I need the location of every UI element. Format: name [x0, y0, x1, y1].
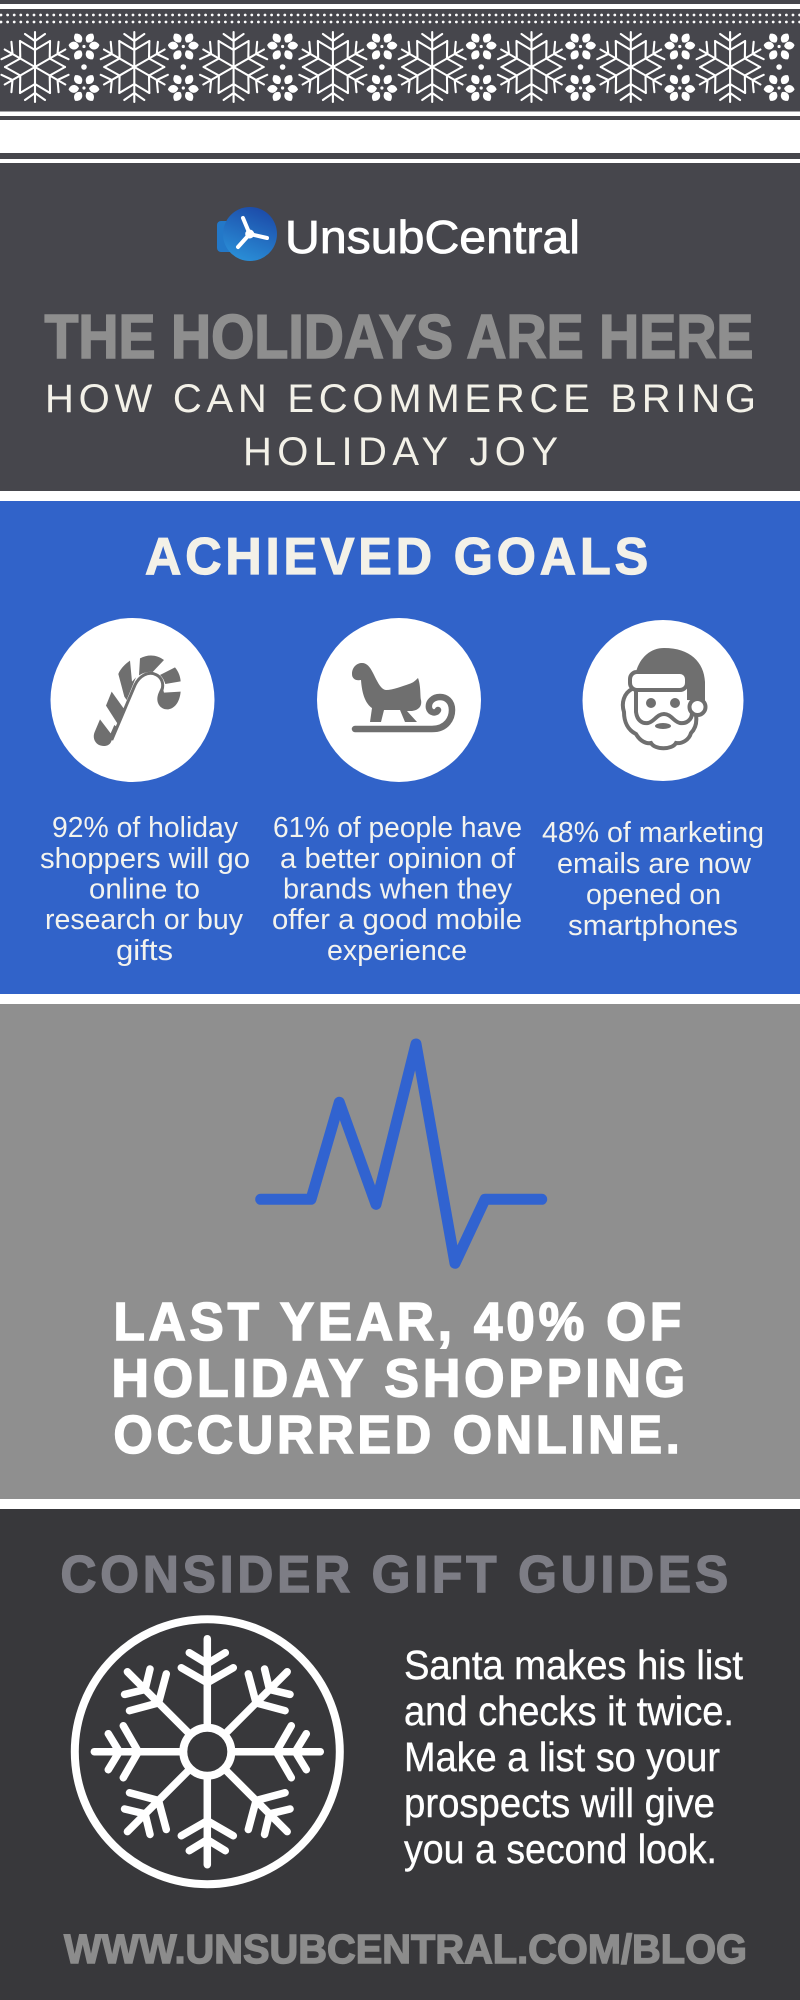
text: 48 percent stat: emails are now — [557, 848, 751, 880]
heading: achieved goals: ACHIEVED GOALS — [145, 528, 652, 586]
text: santa list paragraph: Santa makes his list — [404, 1642, 744, 1688]
text: 92 percent stat: online to — [89, 874, 200, 906]
heading: consider gift guides: CONSIDER GIFT GUIDES — [60, 1546, 732, 1604]
text: last year statement: LAST YEAR, 40% OF — [114, 1292, 685, 1352]
text: 61 percent stat — [272, 812, 522, 967]
text: santa list paragraph: you a second look. — [404, 1826, 717, 1872]
text: 48 percent stat — [542, 817, 764, 942]
subtitle: HOLIDAY JOY — [243, 430, 558, 474]
subtitle: HOW CAN ECOMMERCE BRING — [45, 377, 756, 421]
text: 92 percent stat: 92% of holiday — [52, 812, 239, 844]
text: 61 percent stat: brands when they — [283, 874, 513, 906]
icon: UnsubCentral logo — [217, 207, 277, 261]
subtitle — [45, 377, 756, 474]
text: santa list paragraph: Make a list so your — [404, 1734, 720, 1780]
text: 61 percent stat: offer a good mobile — [272, 904, 522, 936]
text: santa list paragraph — [404, 1642, 744, 1872]
text: last year statement — [112, 1292, 689, 1465]
icon: pulse line — [261, 1044, 542, 1263]
text: santa list paragraph: and checks it twice. — [404, 1688, 734, 1734]
icon: sleigh — [317, 618, 481, 782]
text: 61 percent stat: experience — [327, 935, 467, 967]
icon: candy cane — [50, 618, 214, 782]
text: last year statement: HOLIDAY SHOPPING — [112, 1348, 689, 1408]
text: 92 percent stat: gifts — [116, 935, 173, 967]
logo wordmark: UnsubCentral — [285, 211, 580, 263]
text: 92 percent stat: research or buy — [45, 904, 244, 936]
text: 92 percent stat — [40, 812, 250, 967]
icon: snowflake in circle — [75, 1619, 340, 1884]
text: last year statement: OCCURRED ONLINE. — [114, 1405, 684, 1465]
panel: header — [0, 163, 800, 491]
text: santa list paragraph: prospects will give — [404, 1780, 715, 1826]
panel: last year statistic — [0, 1004, 800, 1499]
text: 48 percent stat: 48% of marketing — [542, 817, 764, 849]
text: 92 percent stat: shoppers will go — [40, 843, 250, 875]
icon: santa — [582, 620, 744, 781]
footer url: WWW.UNSUBCENTRAL.COM/BLOG — [64, 1926, 747, 1972]
panel: gift guides — [0, 1509, 800, 2000]
text: 61 percent stat: 61% of people have — [273, 812, 522, 844]
panel: achieved goals — [0, 501, 800, 994]
panel: snowflake pattern band — [0, 0, 800, 159]
text: 48 percent stat: smartphones — [568, 910, 738, 942]
text: 61 percent stat: a better opinion of — [280, 843, 515, 875]
text: 48 percent stat: opened on — [586, 879, 721, 911]
